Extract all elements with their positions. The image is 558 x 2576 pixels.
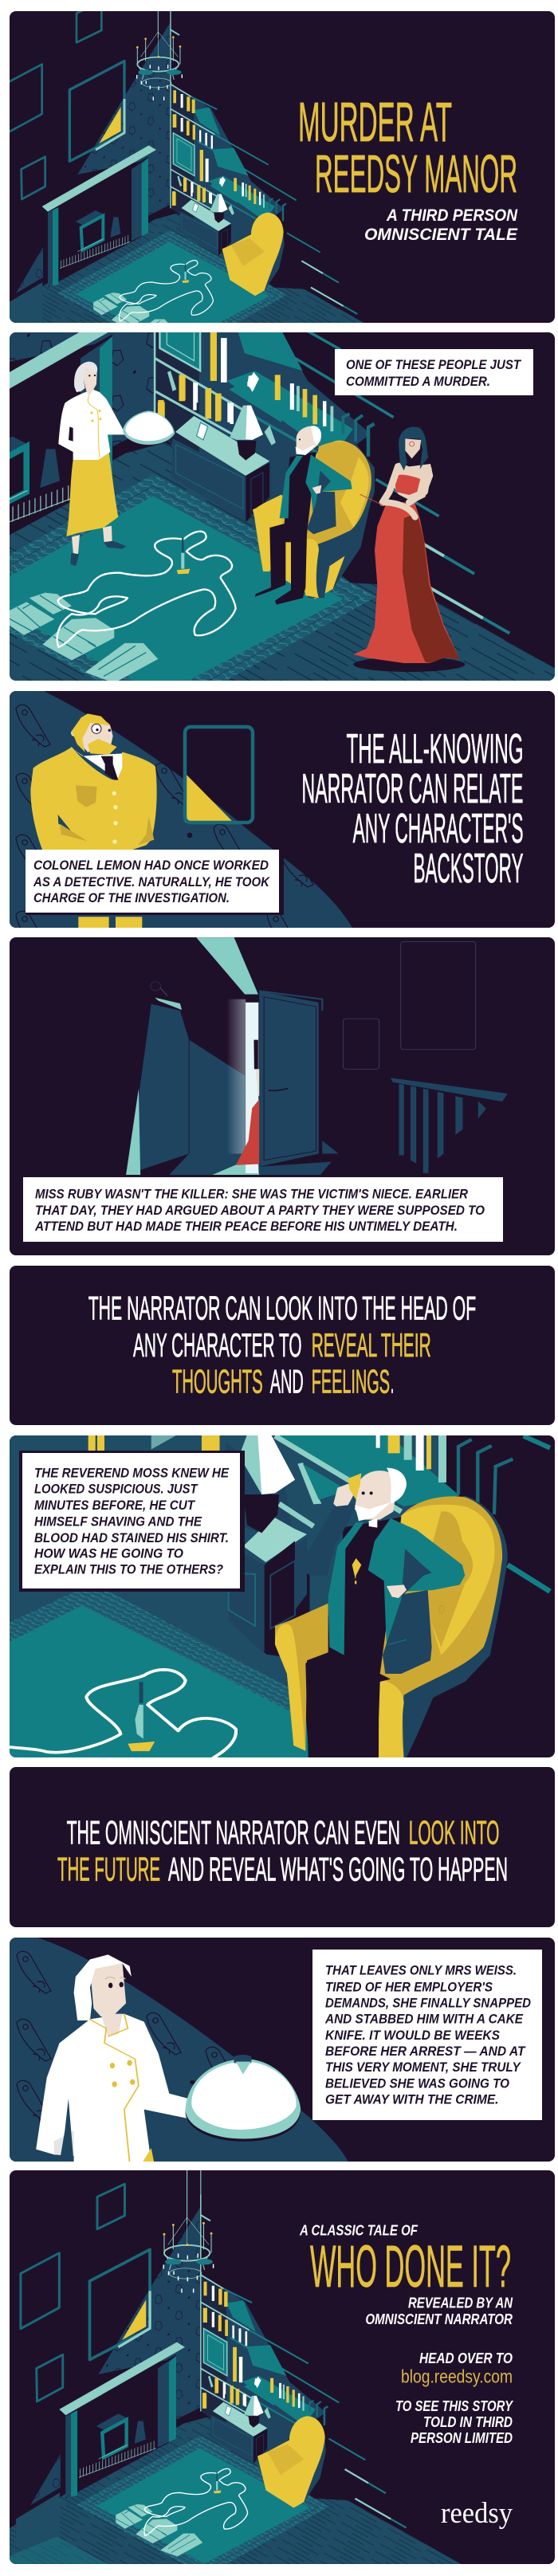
panel 5: thoughts and feelings statement: AND	[270, 1363, 304, 1400]
caption: ONE OF THESE PEOPLE JUST	[346, 358, 522, 372]
panel 6: Reverend Moss	[7, 1433, 555, 1761]
caption: COLONEL LEMON HAD ONCE WORKED	[33, 858, 269, 873]
call to action text: TOLD IN THIRD	[423, 2414, 513, 2430]
illustration: manor library crime scene	[10, 2170, 461, 2564]
illustration: room close-up	[10, 332, 555, 681]
caption: CHARGE OF THE INVESTIGATION.	[33, 891, 230, 905]
subtitle: OMNISCIENT TALE	[364, 226, 518, 244]
feather wallpaper motif	[17, 1951, 240, 2122]
caption: AND STABBED HIM WITH A CAKE	[324, 2012, 524, 2026]
caption	[26, 850, 284, 915]
panel 9: closing call to action	[0, 2159, 555, 2576]
title	[300, 102, 517, 193]
caption: MINUTES BEFORE, HE CUT	[34, 1498, 196, 1513]
caption: HOW WAS HE GOING TO	[34, 1546, 183, 1561]
caption: EXPLAIN THIS TO THE OTHERS?	[34, 1562, 223, 1577]
panel 3: Colonel Lemon backstory	[10, 691, 555, 953]
caption	[312, 1950, 542, 2120]
panel 5: thoughts and feelings statement: .	[391, 1363, 394, 1400]
panel 5: thoughts and feelings statement: REVEAL THEIR	[312, 1326, 431, 1364]
panel 7: look into the future statement: THE FUTURE	[57, 1850, 160, 1887]
illustration: manor library crime scene	[10, 11, 363, 323]
caption: BELIEVED SHE WAS GOING TO	[325, 2076, 509, 2091]
heading: who done it: A CLASSIC TALE OF	[299, 2222, 418, 2238]
caption: KNIFE. IT WOULD BE WEEKS	[325, 2028, 500, 2043]
call to action text: TO SEE THIS STORY	[395, 2398, 514, 2414]
call to action text: HEAD OVER TO	[419, 2350, 513, 2366]
panel 1: title	[10, 11, 555, 323]
caption: MISS RUBY WASN'T THE KILLER: SHE WAS THE VICTIM'S NIECE. EARLIER	[35, 1188, 468, 1202]
subtitle	[365, 209, 518, 240]
panel 7: look into the future statement	[10, 1767, 555, 1927]
heading: who done it	[299, 2222, 513, 2327]
caption: COMMITTED A MURDER.	[346, 375, 490, 389]
call to action text: PERSON LIMITED	[411, 2430, 513, 2446]
caption: THIS VERY MOMENT, SHE TRULY	[325, 2060, 522, 2075]
call to action text	[395, 2350, 514, 2446]
caption	[19, 1451, 245, 1592]
panel 8: Mrs Weiss	[10, 1938, 555, 2162]
icon: picture frame	[185, 727, 253, 838]
caption: HIMSELF SHAVING AND THE	[34, 1514, 202, 1529]
caption: TIRED OF HER EMPLOYER'S	[325, 1980, 493, 1994]
caption: LOOKED SUSPICIOUS. JUST	[34, 1482, 198, 1497]
character: Colonel Lemon	[30, 713, 157, 929]
caption: ATTEND BUT HAD MADE THEIR PEACE BEFORE HIS UNTIMELY DEATH.	[34, 1219, 458, 1234]
illustration: desk, shelves and lamp	[226, 1435, 550, 1652]
wallpaper spotlight	[10, 1938, 348, 2162]
panel 5: thoughts and feelings statement: ANY CHARACTER TO	[133, 1326, 301, 1364]
heading	[303, 733, 523, 883]
illustration: hallway and door	[126, 937, 508, 1175]
panel 4: Miss Ruby at the door	[10, 937, 555, 1255]
call to action text: blog.reedsy.com	[401, 2366, 513, 2386]
caption	[335, 349, 533, 395]
caption: THE REVEREND MOSS KNEW HE	[34, 1466, 230, 1480]
subtitle: A THIRD PERSON	[386, 206, 518, 225]
panel 5: thoughts and feelings statement: THOUGHTS	[172, 1363, 263, 1400]
caption: BLOOD HAD STAINED HIS SHIRT.	[34, 1531, 229, 1545]
character: Mrs Weiss with cloche	[58, 362, 175, 566]
caption: THAT DAY, THEY HAD ARGUED ABOUT A PARTY THEY WERE SUPPOSED TO	[35, 1204, 485, 1218]
caption: GET AWAY WITH THE CRIME.	[325, 2092, 499, 2107]
wallpaper spotlight	[10, 691, 352, 928]
panel 2: the suspects	[10, 332, 555, 681]
character: Reverend Moss in armchair	[253, 426, 375, 605]
character: Reverend Moss holding his cut head	[275, 1468, 508, 1757]
illustration: rug and chalk outline	[7, 1433, 446, 1761]
heading: who done it: REVEALED BY AN	[408, 2295, 513, 2311]
caption: AS A DETECTIVE. NATURALLY, HE TOOK	[33, 875, 270, 889]
character: Miss Ruby in red gown	[353, 427, 465, 672]
panel 5: thoughts and feelings statement: FEELINGS	[312, 1363, 390, 1400]
caption: BEFORE HER ARREST — AND AT	[325, 2044, 526, 2059]
caption: THAT LEAVES ONLY MRS WEISS.	[325, 1964, 517, 1978]
character: Mrs Weiss with cloche	[36, 1954, 301, 2162]
caption	[23, 1177, 503, 1242]
logo: reedsy: reedsy	[441, 2497, 513, 2530]
heading: who done it: OMNISCIENT NARRATOR	[365, 2311, 513, 2327]
panel 5: thoughts and feelings statement	[10, 1266, 555, 1425]
caption: DEMANDS, SHE FINALLY SNAPPED	[325, 1996, 531, 2010]
